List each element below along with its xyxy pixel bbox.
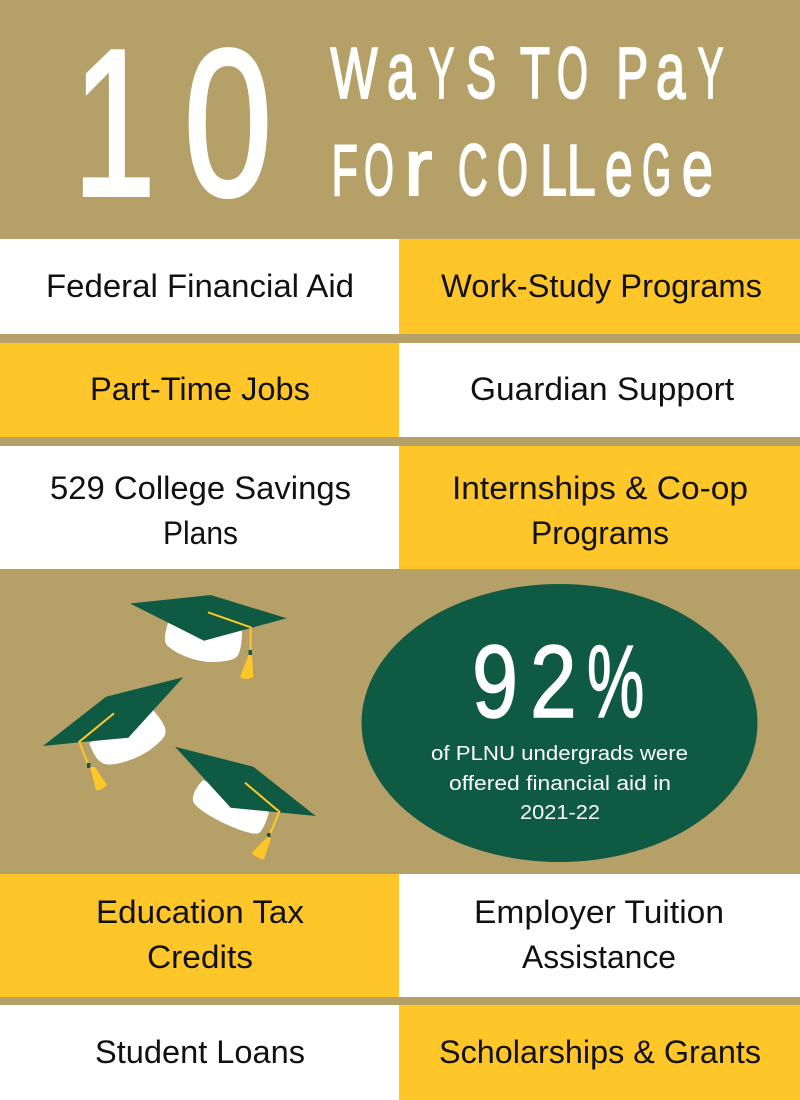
title line 1: S [466, 34, 496, 114]
panel: Education Tax Credits: Education Tax [96, 894, 304, 930]
statistic number: 9 [472, 624, 518, 739]
icon: graduation cap left [43, 677, 183, 790]
title line 2: O [364, 131, 394, 211]
statistic caption [431, 743, 688, 824]
statistic caption: offered financial aid in [449, 773, 671, 795]
panel: Employer Tuition Assistance: Employer Tuition [474, 894, 724, 930]
title line 1: O [557, 34, 588, 114]
panel: Employer Tuition Assistance [399, 874, 800, 997]
panel: 529 College Savings Plans: 529 College Savings [50, 470, 351, 506]
panel: Education Tax Credits [0, 874, 399, 997]
panel: Part-Time Jobs [0, 343, 399, 437]
title line 2: e [682, 123, 713, 212]
illustration: graduation caps [43, 595, 316, 860]
panel: Guardian Support: Guardian Support [470, 371, 734, 407]
panel: Work-Study Programs: Work-Study Programs [441, 268, 762, 304]
statistic number: 2 [530, 624, 577, 739]
title line 1: W [330, 34, 378, 114]
panel: Scholarships and Grants [399, 1005, 800, 1100]
panel: Education Tax Credits: Credits [147, 939, 253, 975]
callout: 92 percent statistic [362, 584, 758, 862]
panel: Scholarships and Grants: Scholarships & Grants [439, 1034, 761, 1070]
panel: Student Loans: Student Loans [95, 1034, 305, 1070]
panel: 529 College Savings Plans [0, 446, 399, 569]
panel: Internships and Co-op Programs: Programs [531, 515, 669, 551]
panel: Internships and Co-op Programs: Internships & Co-op [452, 470, 748, 506]
title line 1: Y [698, 34, 724, 114]
statistic number: % [587, 624, 644, 739]
panel: Work-Study Programs [399, 239, 800, 334]
panel: Student Loans [0, 1005, 399, 1100]
icon: graduation cap right [175, 747, 316, 860]
panel: Internships and Co-op Programs [399, 446, 800, 569]
panel: Federal Financial Aid: Federal Financial Aid [46, 268, 354, 304]
title number 10: 1 [73, 7, 156, 240]
title line 2: F [332, 131, 358, 211]
title line 2: C [458, 131, 488, 211]
statistic caption: of PLNU undergrads were [431, 743, 688, 765]
title line 2: r [404, 123, 432, 212]
title line 1: P [616, 34, 648, 114]
title number 10: 0 [184, 7, 272, 240]
panel: Federal Financial Aid [0, 239, 399, 334]
title line 2: G [642, 131, 671, 211]
title line 2: L [540, 131, 567, 211]
title line 1: a [387, 26, 416, 115]
panel: Employer Tuition Assistance: Assistance [522, 939, 676, 975]
title line 2: L [567, 131, 596, 211]
icon: graduation cap top [130, 595, 287, 679]
title line 2: O [497, 131, 528, 211]
title line 2: e [605, 123, 633, 212]
title [73, 7, 724, 240]
panel: 529 College Savings Plans: Plans [163, 515, 238, 551]
title line 1: T [520, 34, 550, 114]
statistic caption: 2021-22 [520, 802, 600, 824]
title line 1: a [656, 26, 686, 115]
panel: Part-Time Jobs: Part-Time Jobs [90, 371, 310, 407]
panel: Guardian Support [399, 343, 800, 437]
title line 1: Y [429, 34, 454, 114]
